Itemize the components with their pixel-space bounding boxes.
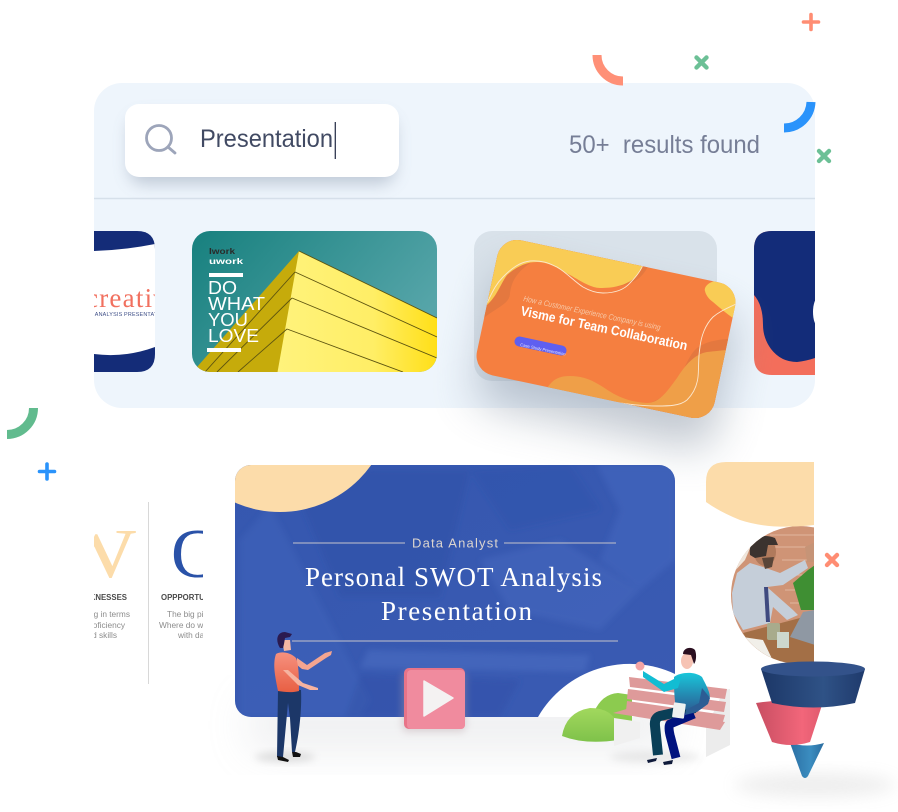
panel: swot slide fragment: with data (177, 630, 212, 640)
search box: Presentation (200, 125, 333, 153)
funnel blue cone (790, 743, 824, 778)
search box (125, 104, 399, 184)
icon: green cross top (696, 58, 706, 68)
illustration: bench (610, 677, 730, 763)
illustration: green bush (562, 693, 632, 742)
panel: swot slide fragment: and skills (83, 630, 117, 640)
panel: personal swot slide (235, 465, 675, 717)
panel: swot slide fragment (94, 502, 203, 684)
card: do what you love: uwork (209, 256, 243, 266)
slide subtitle: Data Analyst (412, 536, 498, 550)
icon: coral plus (804, 14, 818, 30)
photo: plant (793, 565, 815, 610)
photo: table (743, 618, 814, 663)
decor: coral arc (597, 55, 623, 81)
card: do what you love: DO (208, 278, 237, 298)
panel: swot slide fragment: W (52, 516, 136, 593)
card: do what you love: Iwork (209, 246, 235, 256)
decor: green arc (7, 408, 34, 434)
shadow: tilted card (472, 266, 739, 452)
panel: search results (86, 83, 823, 408)
panel: swot slide fragment: OPPPORTUNITIES (161, 593, 230, 602)
panel: right slide with photo (706, 462, 815, 670)
card: do what you love: WHAT (208, 294, 265, 314)
decor: blue arc (784, 102, 811, 128)
card: creative analysis: creative (86, 283, 180, 313)
results count: 50+ results found (569, 131, 760, 159)
card: gray placeholder (474, 231, 717, 381)
photo: man shirt (732, 560, 808, 630)
panel: swot slide fragment: WEAKNESSES (72, 593, 127, 602)
card: creative analysis: T ANALYSIS PRESENTATION (90, 312, 168, 318)
card: do what you love: YOU (208, 310, 248, 330)
photo: mug and glass (767, 623, 780, 640)
card: do what you love: LOVE (208, 326, 259, 346)
slide title (305, 562, 602, 626)
card: visme team collaboration: Case Study Presentation (520, 342, 567, 357)
panel: swot slide fragment: C (171, 516, 218, 593)
panel: swot slide fragment: Where do we want (159, 620, 228, 630)
card: do what you love (190, 231, 437, 375)
photo: man head (755, 545, 776, 566)
panel: swot slide fragment: The big picture (167, 609, 222, 619)
icon: blue plus (40, 464, 54, 479)
funnel red cone (756, 701, 822, 745)
photo: brick wall (731, 526, 814, 662)
illustration: seated man (636, 648, 710, 765)
card: visme team collaboration (476, 240, 736, 418)
funnel navy cone (761, 662, 865, 708)
slide title: Presentation (381, 596, 532, 626)
shadow: lower section floor (250, 700, 670, 750)
icon: play button (402, 668, 466, 732)
illustration: standing presenter (255, 632, 332, 762)
card: visme team collaboration: How a Customer Experience Company is using (523, 294, 662, 332)
icon: green cross right (819, 151, 829, 161)
slide title: Personal SWOT Analysis (305, 562, 602, 592)
card: right edge navy (754, 231, 815, 375)
card: creative analysis (94, 231, 155, 372)
illustration: 3d funnel (735, 662, 895, 797)
card: visme team collaboration: Visme for Team Collaboration (519, 303, 689, 353)
panel: swot slide fragment: of proficiency (76, 620, 126, 630)
photo: laptop (790, 610, 815, 645)
panel: swot slide fragment: lacking in terms (72, 609, 130, 619)
icon: coral cross (827, 555, 837, 565)
